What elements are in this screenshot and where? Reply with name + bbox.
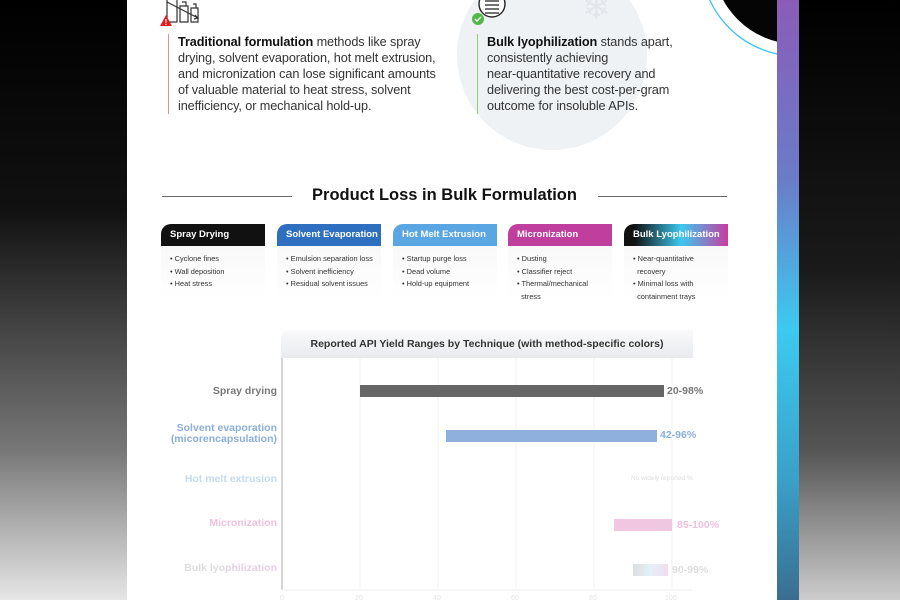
decorative light circle [457,0,647,150]
text block: traditional formulation: inefficiency, or mechanical hold-up. [178,99,371,113]
card: solvent evaporation [277,224,381,300]
text block: traditional formulation [168,34,436,114]
label: solvent evaporation [171,422,277,445]
black circle top right [709,0,777,55]
card: bulk lyophilization: Bulk Lyophilization [633,229,720,240]
text block: bulk lyophilization: consistently achieving [487,51,608,65]
card: solvent evaporation: • Solvent inefficiency [286,267,354,276]
label: hot melt extrusion: Hot melt extrusion [185,473,277,485]
card: hot melt extrusion [393,224,497,300]
icon: bottles with warning: ! [165,18,167,27]
card: bulk lyophilization [624,224,728,300]
icon: bottles with warning [160,0,200,27]
card: micronization [508,224,612,300]
icon: document with check [472,0,506,25]
card: hot melt extrusion: • Startup purge loss [402,254,467,263]
label: bulk lyophilization: Bulk lyophilization [184,562,277,574]
label: spray drying: Spray drying [213,385,277,397]
card: bulk lyophilization: • Near-quantitative [633,254,694,263]
text block: bulk lyophilization: delivering the best cost-per-gram [487,83,669,97]
text block: bulk lyophilization: near-quantitative recovery and [487,67,655,81]
card: hot melt extrusion: • Hold-up equipment [402,279,469,288]
text block: bulk lyophilization [477,34,673,114]
card: micronization: • Thermal/mechanical [517,279,588,288]
gradient side strip [775,0,799,600]
value: 20-98%: 20-98% [667,385,703,397]
text block: traditional formulation: Traditional formulation methods like spray [178,35,421,49]
card: micronization: • Classifier reject [517,267,572,276]
value: 90-99%: 90-99% [672,564,708,576]
card: spray drying: • Cyclone fines [170,254,219,263]
card: solvent evaporation: • Residual solvent issues [286,279,368,288]
text block: traditional formulation: and micronization can lose significant amounts [178,67,436,81]
card: spray drying: • Heat stress [170,279,212,288]
label: solvent evaporation: (micorencapsulation) [171,433,277,445]
card: spray drying: • Wall deposition [170,267,224,276]
card: micronization: • Dusting [517,254,547,263]
heading: product loss: Product Loss in Bulk Formulation [312,186,577,204]
label: micronization: Micronization [209,517,277,529]
card: micronization: stress [521,292,541,301]
card: bulk lyophilization: containment trays [637,292,695,301]
card: bulk lyophilization: recovery [637,267,665,276]
card: solvent evaporation: • Emulsion separation loss [286,254,373,263]
value: 42-96%: 42-96% [660,429,696,441]
plot area [280,358,692,600]
text block: traditional formulation: of valuable material to heat stress, solvent [178,83,411,97]
page [127,0,777,600]
card: spray drying [161,224,265,300]
chart header [281,330,693,358]
right background panel [798,0,900,600]
value: 85-100%: 85-100% [677,519,719,531]
card: hot melt extrusion: Hot Melt Extrusion [402,229,486,240]
text block: traditional formulation: drying, solvent evaporation, hot melt extrusion, [178,51,436,65]
text block: bulk lyophilization: outcome for insoluble APIs. [487,99,638,113]
card: spray drying: Spray Drying [170,229,229,240]
card: micronization: Micronization [517,229,578,240]
chart header: Reported API Yield Ranges by Technique (with method-specific colors) [310,338,663,350]
card: bulk lyophilization: • Minimal loss with [633,279,694,288]
card: solvent evaporation: Solvent Evaporation [286,229,378,240]
label: solvent evaporation: Solvent evaporation [177,422,277,434]
card: hot melt extrusion: • Dead volume [402,267,450,276]
value: no widely reported: No widely reported % [631,475,693,482]
chart: yield ranges [171,335,719,600]
text block: bulk lyophilization: Bulk lyophilization stands apart, [487,35,673,49]
